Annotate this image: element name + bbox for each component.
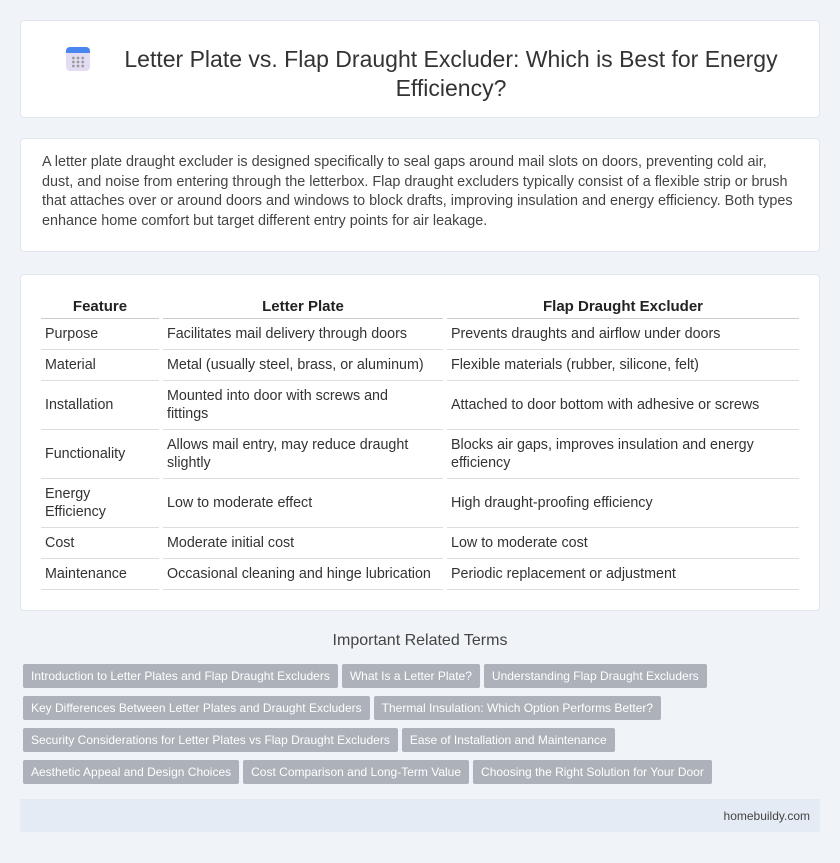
comparison table: Flap Draught Excluder bbox=[543, 298, 703, 315]
title: Letter Plate vs. Flap Draught Excluder: Which is Best for Energy Efficiency? bbox=[124, 46, 778, 101]
tags bbox=[23, 664, 712, 784]
tags: Ease of Installation and Maintenance bbox=[410, 733, 607, 747]
comparison table: Functionality bbox=[45, 446, 125, 462]
tags: Cost Comparison and Long-Term Value bbox=[251, 765, 461, 779]
comparison table: Installation bbox=[45, 397, 113, 413]
comparison table bbox=[20, 274, 820, 611]
comparison table: Attached to door bottom with adhesive or screws bbox=[451, 397, 759, 413]
comparison table: Energy bbox=[45, 486, 90, 502]
tags: What Is a Letter Plate? bbox=[350, 669, 472, 683]
footer: homebuildy.com bbox=[724, 809, 810, 823]
comparison table: Maintenance bbox=[45, 566, 127, 582]
intro text: A letter plate draught excluder is designed specifically to seal gaps around mail slots on doors, preventing cold air, dust, and noise from entering through the letterbox. Flap draught excluders typically consist of a flexible strip or brush that attaches over or around doors and windows to block drafts, improving insulation and energy efficiency. Both types enhance home comfort but target different entry points for air leakage. bbox=[42, 154, 793, 228]
related terms heading: Important Related Terms bbox=[333, 632, 507, 649]
footer bbox=[20, 799, 820, 832]
tags: Key Differences Between Letter Plates and Draught Excluders bbox=[31, 701, 362, 715]
comparison table: Low to moderate effect bbox=[167, 495, 312, 511]
tags: Thermal Insulation: Which Option Performs Better? bbox=[382, 701, 653, 715]
tags: Security Considerations for Letter Plates vs Flap Draught Excluders bbox=[31, 733, 390, 747]
intro text bbox=[20, 138, 820, 252]
comparison table: Facilitates mail delivery through doors bbox=[167, 326, 407, 342]
comparison table: Efficiency bbox=[45, 504, 106, 520]
comparison table: fittings bbox=[167, 406, 208, 422]
icon: calendar bbox=[66, 47, 90, 71]
comparison table: Blocks air gaps, improves insulation and energy efficiency bbox=[451, 437, 754, 471]
header card bbox=[20, 20, 820, 118]
comparison table: Metal (usually steel, brass, or aluminum) bbox=[167, 357, 424, 373]
comparison table: Material bbox=[45, 357, 96, 373]
comparison table: Cost bbox=[45, 535, 74, 551]
comparison table: Moderate initial cost bbox=[167, 535, 294, 551]
comparison table: Letter Plate bbox=[262, 298, 344, 315]
comparison table: Low to moderate cost bbox=[451, 535, 588, 551]
tags: Choosing the Right Solution for Your Door bbox=[481, 765, 704, 779]
tags: Understanding Flap Draught Excluders bbox=[492, 669, 699, 683]
comparison table: Periodic replacement or adjustment bbox=[451, 566, 676, 582]
comparison table: Feature bbox=[73, 298, 127, 315]
comparison table: Flexible materials (rubber, silicone, felt) bbox=[451, 357, 699, 373]
tags: Introduction to Letter Plates and Flap Draught Excluders bbox=[31, 669, 330, 683]
comparison table: Allows mail entry, may reduce draught slightly bbox=[167, 437, 408, 471]
comparison table: High draught-proofing efficiency bbox=[451, 495, 653, 511]
tags: Aesthetic Appeal and Design Choices bbox=[31, 765, 231, 779]
comparison table: Prevents draughts and airflow under doors bbox=[451, 326, 720, 342]
comparison table: Occasional cleaning and hinge lubrication bbox=[167, 566, 431, 582]
comparison table: Purpose bbox=[45, 326, 98, 342]
comparison table: Mounted into door with screws and bbox=[167, 388, 388, 404]
